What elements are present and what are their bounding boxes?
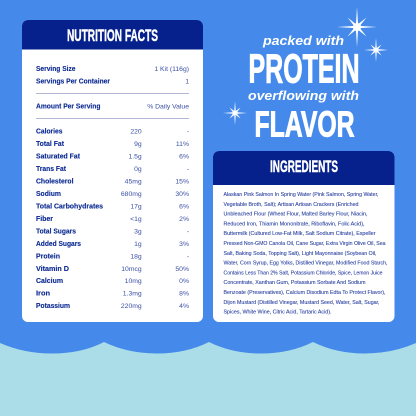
nutrient table: Total Fat bbox=[36, 141, 65, 148]
nutrient table: - bbox=[187, 128, 189, 136]
nutrient table: Sodium bbox=[36, 191, 61, 198]
nutrient table: - bbox=[187, 166, 189, 173]
icon: small sparkle bbox=[364, 38, 388, 62]
ingredients header bar bbox=[213, 151, 394, 185]
headline: packed with protein overflowing with flavor bbox=[248, 33, 360, 144]
nutrient table: 1.5g bbox=[128, 154, 142, 160]
ingredients list: Water, Corn Syrup, Egg Yolks, Distilled Vinegar, Modified Food Starch, bbox=[224, 261, 388, 267]
nutrient table: 17g bbox=[130, 203, 142, 210]
nutrient table: 1.3mg bbox=[123, 291, 142, 298]
ingredients list: Unbleached Flour (Wheat Flour, Malted Barley Flour, Niacin, bbox=[224, 212, 368, 218]
nutrient table: Saturated Fat bbox=[36, 154, 81, 160]
serving information: 1 bbox=[185, 78, 189, 86]
nutrient table: 2% bbox=[179, 216, 189, 223]
nutrient table: 30% bbox=[175, 191, 189, 198]
amount per serving header: Amount Per Serving bbox=[36, 104, 100, 110]
headline: packed with protein overflowing with flavor: overflowing with bbox=[248, 88, 359, 103]
panel: ingredients bbox=[213, 151, 394, 322]
nutrient table: - bbox=[187, 253, 189, 260]
ingredients list bbox=[224, 192, 388, 316]
nutrient table: 50% bbox=[175, 266, 189, 273]
serving information: 1 Kit (116g) bbox=[154, 66, 189, 73]
amount per serving header: % Daily Value bbox=[147, 104, 189, 110]
nutrient table: Calories bbox=[36, 128, 63, 136]
nutrient table: Total Sugars bbox=[36, 228, 76, 235]
nutrient table: Iron bbox=[36, 291, 50, 298]
headline: packed with protein overflowing with flavor: packed with bbox=[262, 33, 344, 48]
ingredients list: Buttermilk (Cultured Low-Fat Milk, Salt Sodium Citrate), Expeller bbox=[224, 231, 376, 237]
nutrient table: 680mg bbox=[121, 191, 142, 198]
nutrient table bbox=[36, 128, 189, 310]
ingredients list: Spices, White Wine, Citric Acid, Tartaric Acid). bbox=[224, 310, 332, 316]
nutrient table: 220mg bbox=[121, 303, 142, 310]
nutrient table: 3g bbox=[134, 228, 142, 235]
nutrition header bar bbox=[22, 20, 203, 50]
serving information: Serving Size bbox=[36, 66, 76, 73]
nutrient table: 11% bbox=[176, 141, 189, 148]
nutrient table: Fiber bbox=[36, 216, 53, 223]
nutrient table: Calcium bbox=[36, 278, 63, 285]
ingredients list: Salt, Baking Soda, Topping Salt), Light Mayonnaise (Soybean Oil, bbox=[224, 251, 377, 257]
serving information: Servings Per Container bbox=[36, 78, 110, 86]
ingredients list: Vegetable Broth, Salt); Artisan Artisan Crackers (Enriched bbox=[224, 202, 358, 208]
ingredients list: Reduced Iron, Thiamin Mononitrate, Riboflavin, Folic Acid), bbox=[224, 221, 365, 227]
headline: packed with protein overflowing with flavor: FLAVOR bbox=[254, 104, 354, 144]
heading: nutrition facts: NUTRITION FACTS bbox=[67, 27, 158, 45]
nutrient table: Total Carbohydrates bbox=[36, 203, 103, 210]
ingredients list: Benzoate (Preservatives), Calcium Disodium Edta To Protect Flavor), bbox=[224, 290, 386, 296]
nutrient table: 10mg bbox=[125, 278, 142, 285]
nutrient table: 18g bbox=[130, 253, 142, 260]
ingredients list: Pressed Non-GMO Canola Oil, Cane Sugar, Extra Virgin Olive Oil, Sea bbox=[224, 241, 386, 247]
amount per serving header bbox=[36, 104, 189, 110]
nutrient table: Potassium bbox=[36, 303, 70, 310]
panel: nutrition facts bbox=[22, 20, 203, 322]
nutrient table: - bbox=[187, 228, 189, 235]
nutrient table: Added Sugars bbox=[36, 241, 81, 248]
nutrient table: 220 bbox=[130, 128, 142, 136]
nutrient table: 9g bbox=[134, 141, 142, 148]
icon: large sparkle bbox=[337, 7, 377, 47]
nutrient table: 0g bbox=[134, 166, 142, 173]
nutrient table: 15% bbox=[175, 178, 189, 185]
icon: left sparkle bbox=[223, 101, 247, 125]
ingredients list: Concentrate, Xanthan Gum, Potassium Sorbate And Sodium bbox=[224, 280, 366, 286]
nutrient table: 3% bbox=[179, 241, 189, 248]
nutrient table: 6% bbox=[179, 203, 189, 210]
nutrient table: 1g bbox=[134, 241, 142, 248]
nutrient table: Trans Fat bbox=[36, 166, 67, 173]
nutrient table: 45mg bbox=[125, 178, 142, 185]
ingredients list: Dijon Mustard (Distilled Vinegar, Mustard Seed, Water, Salt, Sugar, bbox=[224, 300, 380, 306]
nutrient table: Cholesterol bbox=[36, 178, 74, 185]
serving information bbox=[36, 66, 189, 86]
heading: ingredients: INGREDIENTS bbox=[270, 158, 338, 176]
ingredients list: Contains Less Than 2% Salt, Potassium Chloride, Spice, Lemon Juice bbox=[224, 270, 382, 276]
nutrient table: Protein bbox=[36, 253, 60, 260]
nutrient table: 10mcg bbox=[121, 266, 142, 273]
ingredients list: Alaskan Pink Salmon In Spring Water (Pink Salmon, Spring Water, bbox=[224, 192, 379, 198]
nutrient table: <1g bbox=[130, 216, 142, 223]
nutrient table: 4% bbox=[179, 303, 189, 310]
nutrient table: Vitamin D bbox=[36, 266, 69, 273]
nutrient table: 6% bbox=[179, 154, 189, 160]
nutrient table: 8% bbox=[179, 291, 189, 298]
nutrient table: 0% bbox=[179, 278, 189, 285]
